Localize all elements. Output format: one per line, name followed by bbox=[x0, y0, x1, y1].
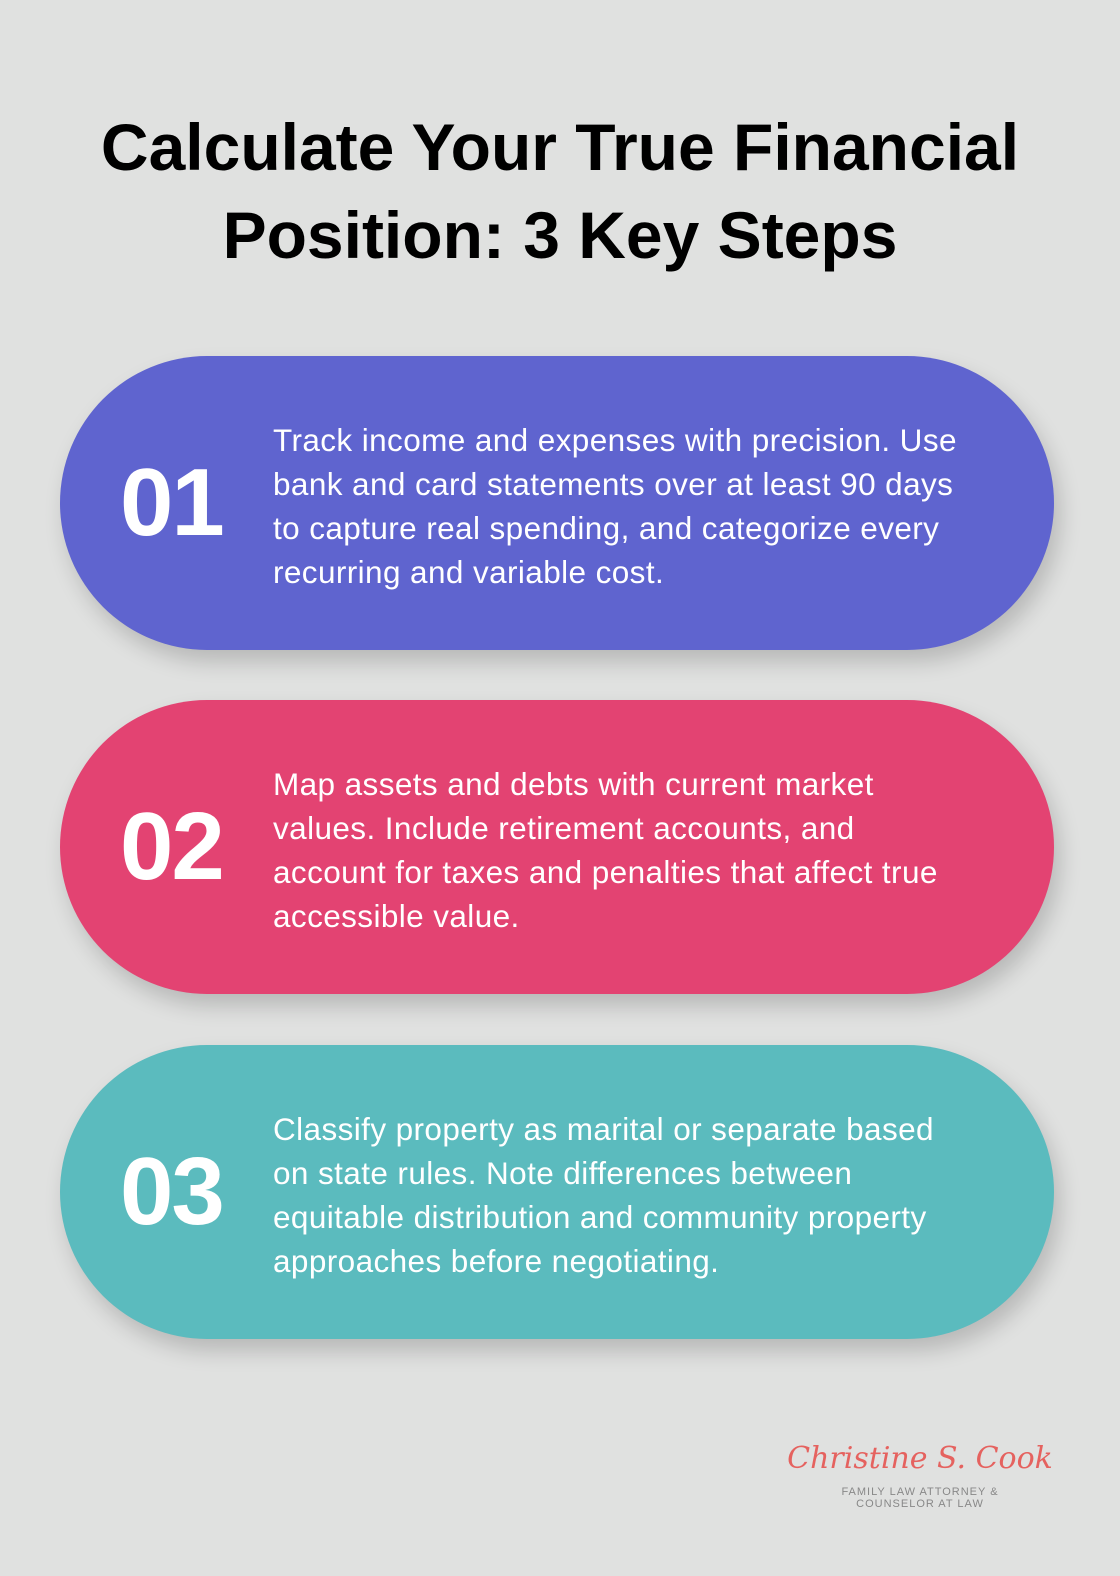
text step 01: recurring and variable cost. bbox=[273, 554, 664, 590]
text step 01: to capture real spending, and categorize every bbox=[273, 510, 939, 546]
logo name: Christine S. Cook bbox=[787, 1441, 1053, 1476]
logo subtitle: COUNSELOR AT LAW bbox=[856, 1498, 984, 1510]
text step 03 bbox=[273, 1111, 934, 1279]
logo subtitle bbox=[841, 1486, 999, 1510]
logo bbox=[787, 1441, 1053, 1510]
text step 01: bank and card statements over at least 90 days bbox=[273, 466, 953, 502]
text step 02 bbox=[273, 766, 938, 934]
panel: step 02 bbox=[60, 700, 1054, 994]
text step 03: approaches before negotiating. bbox=[273, 1243, 719, 1279]
number 01: 01 bbox=[120, 449, 223, 556]
title: Calculate Your True Financial bbox=[101, 110, 1019, 184]
text step 03: on state rules. Note differences between bbox=[273, 1155, 852, 1191]
text step 03: equitable distribution and community property bbox=[273, 1199, 927, 1235]
number 02: 02 bbox=[120, 793, 223, 900]
panel: step 03 bbox=[60, 1045, 1054, 1339]
text step 02: values. Include retirement accounts, and bbox=[273, 810, 855, 846]
title bbox=[101, 110, 1019, 272]
text step 01 bbox=[273, 422, 957, 590]
panel: step 01 bbox=[60, 356, 1054, 650]
text step 02: Map assets and debts with current market bbox=[273, 766, 874, 802]
text step 01: Track income and expenses with precision. Use bbox=[273, 422, 957, 458]
text step 03: Classify property as marital or separate based bbox=[273, 1111, 934, 1147]
number 03: 03 bbox=[120, 1138, 223, 1245]
text step 02: account for taxes and penalties that affect true bbox=[273, 854, 938, 890]
logo subtitle: FAMILY LAW ATTORNEY & bbox=[841, 1486, 999, 1498]
title: Position: 3 Key Steps bbox=[223, 198, 897, 272]
text step 02: accessible value. bbox=[273, 898, 520, 934]
